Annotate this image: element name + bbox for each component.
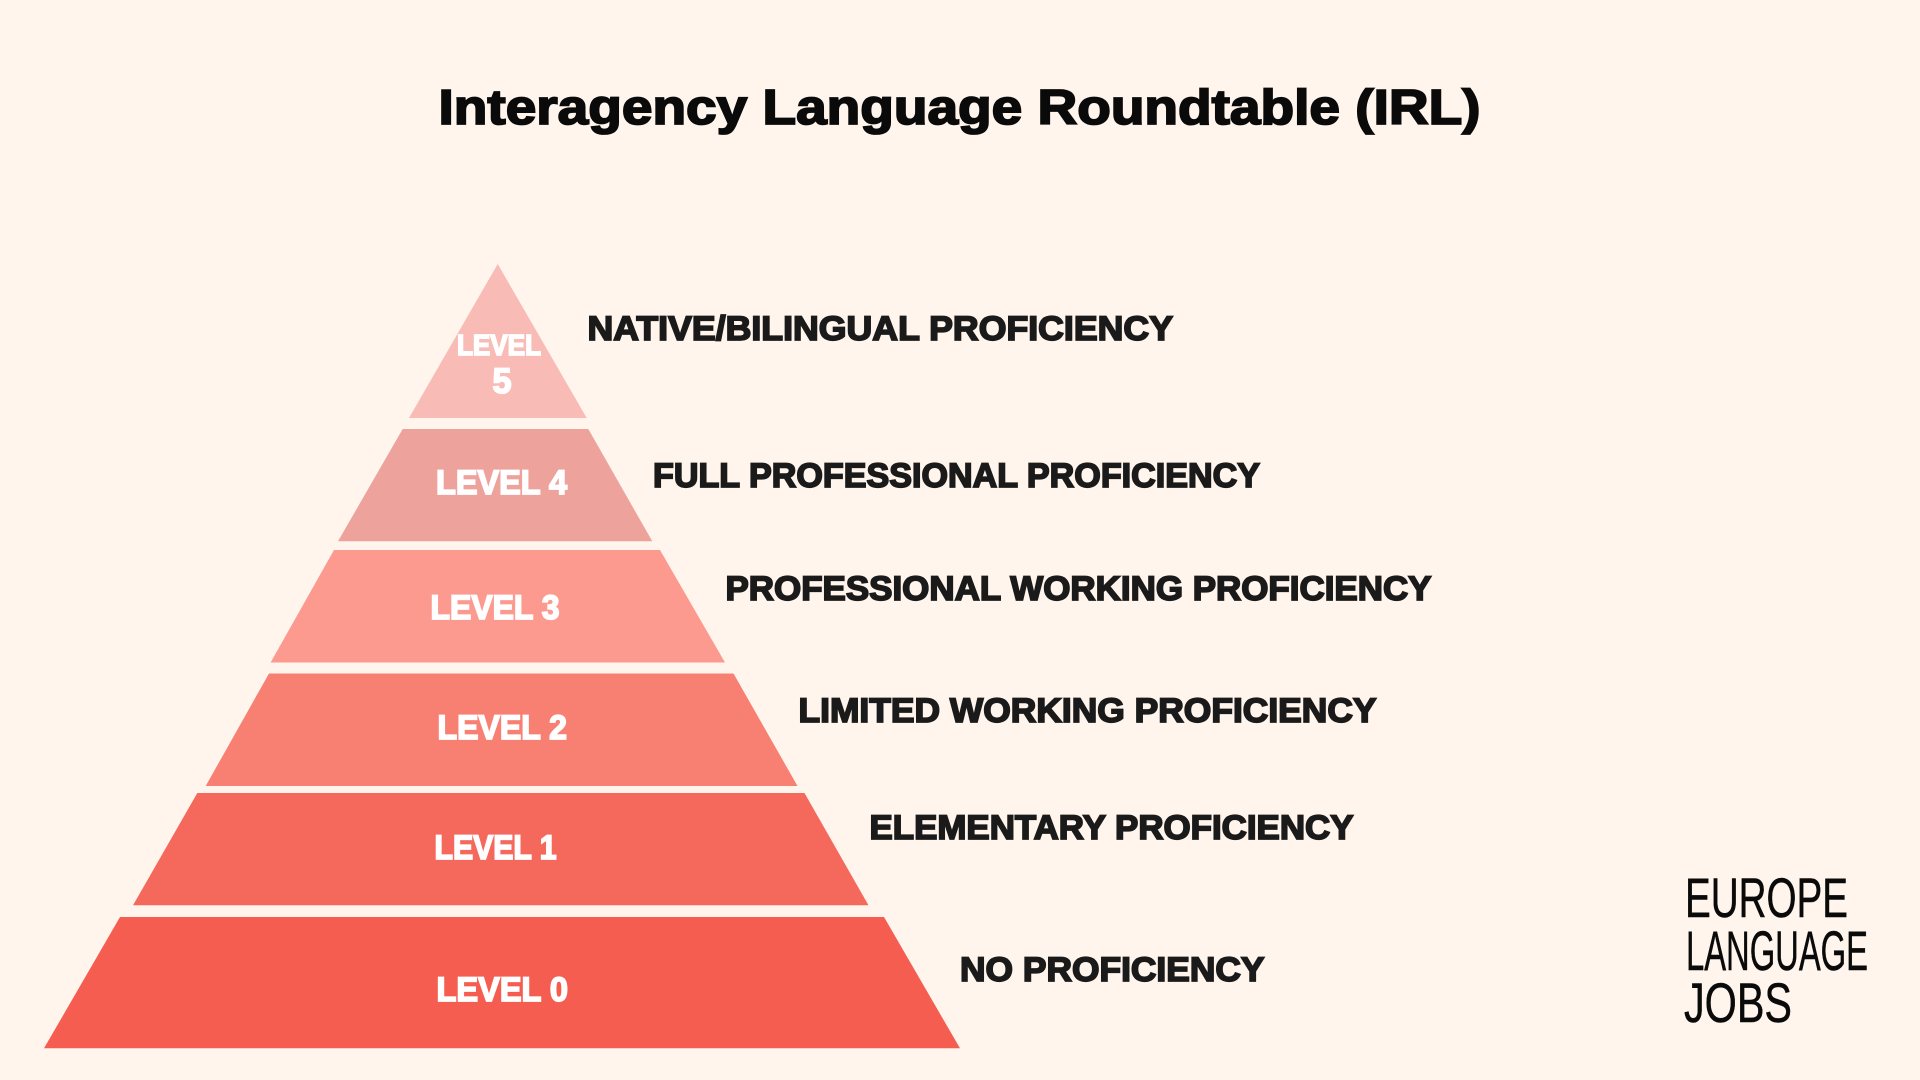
level 0 tier: LEVEL 0 xyxy=(436,971,568,1009)
level 1 tier xyxy=(133,793,868,905)
label: full professional proficiency: FULL PROFESSIONAL PROFICIENCY xyxy=(653,457,1260,495)
logo: Europe Language Jobs xyxy=(1684,866,1868,1034)
logo: Europe Language Jobs: EUROPE xyxy=(1685,866,1848,929)
level 4 tier xyxy=(338,429,652,541)
pyramid chart xyxy=(44,264,960,1048)
level 5 tier xyxy=(409,264,587,418)
label: limited working proficiency: LIMITED WORKING PROFICIENCY xyxy=(798,692,1377,730)
level 0 tier xyxy=(44,917,960,1048)
level 5 tier: LEVEL xyxy=(457,330,541,362)
level 3 tier: LEVEL 3 xyxy=(430,589,560,627)
label: native/bilingual proficiency: NATIVE/BILINGUAL PROFICIENCY xyxy=(588,310,1173,348)
level 4 tier: LEVEL 4 xyxy=(436,464,567,502)
title: Interagency Language Roundtable (IRL) xyxy=(438,81,1480,135)
level 2 tier xyxy=(206,674,797,786)
level 5 tier: 5 xyxy=(492,362,512,401)
logo: Europe Language Jobs: JOBS xyxy=(1684,971,1792,1034)
level 2 tier: LEVEL 2 xyxy=(438,709,567,747)
label: no proficiency: NO PROFICIENCY xyxy=(960,951,1265,989)
label: professional working proficiency: PROFESSIONAL WORKING PROFICIENCY xyxy=(726,570,1432,608)
level 1 tier: LEVEL 1 xyxy=(434,829,556,867)
label: elementary proficiency: ELEMENTARY PROFICIENCY xyxy=(870,809,1354,847)
level 3 tier xyxy=(271,550,725,662)
